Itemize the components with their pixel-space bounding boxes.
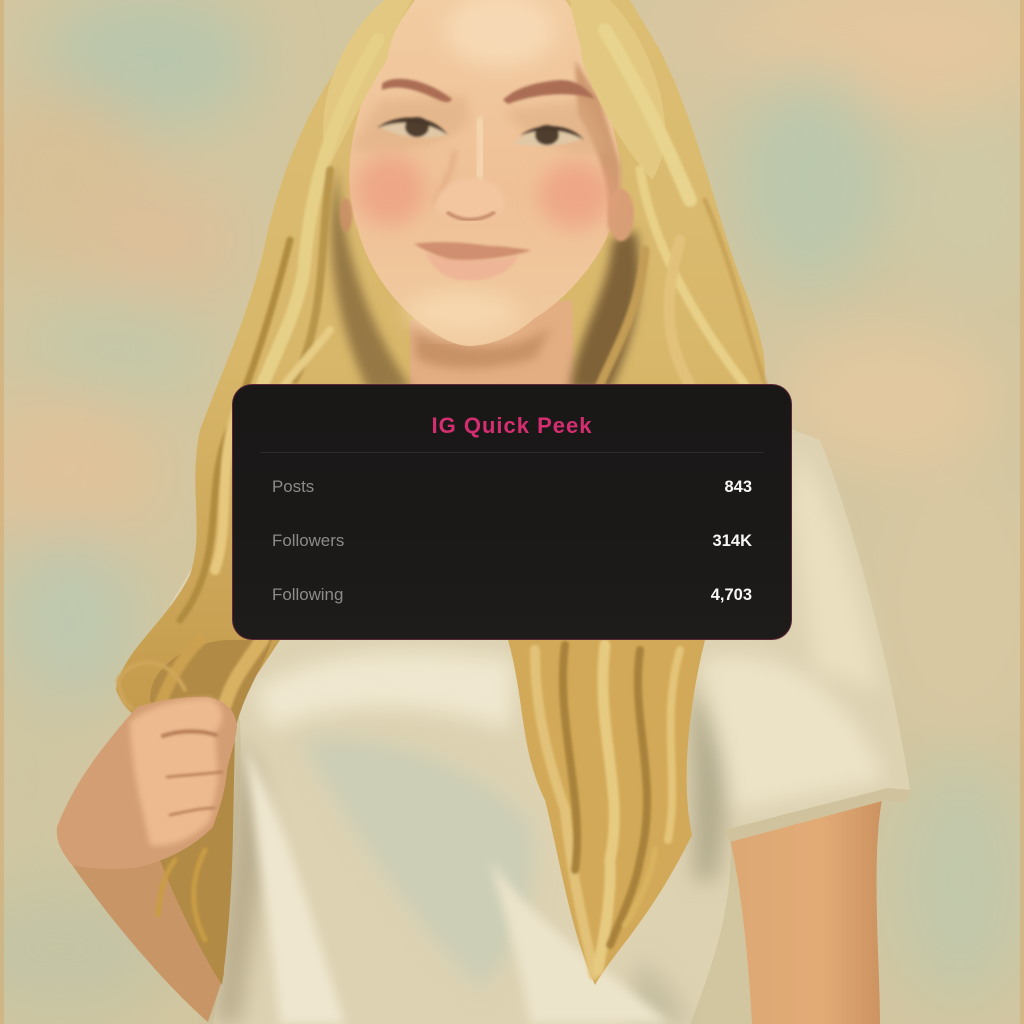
stat row: following: 4,703	[711, 586, 752, 604]
lower left hair	[118, 640, 272, 985]
eyebrows	[382, 79, 595, 104]
stat row: following	[272, 585, 752, 604]
face	[349, 0, 620, 346]
stat row: followers: 314K	[713, 532, 752, 550]
stat row: following: Following	[272, 585, 343, 604]
right arm and sleeve edge	[724, 788, 912, 1024]
right eye	[514, 125, 584, 146]
arm holding hair	[70, 830, 224, 1022]
card title: IG Quick Peek	[432, 413, 592, 438]
fist	[57, 697, 237, 869]
chin highlight	[407, 292, 517, 332]
stat row: followers	[272, 531, 752, 550]
cheeks	[356, 154, 611, 229]
ear	[340, 189, 634, 241]
forehead highlight	[445, 0, 555, 66]
stats card	[232, 384, 792, 640]
front hair lock	[508, 640, 705, 985]
t-shirt	[170, 425, 910, 1024]
long hair strands	[180, 30, 765, 620]
mouth	[414, 242, 532, 280]
neck	[410, 300, 575, 390]
left eye	[377, 117, 448, 138]
stat row: followers: Followers	[272, 531, 344, 550]
hair back mass	[116, 0, 765, 720]
nose	[435, 118, 505, 221]
stat row: posts	[272, 477, 752, 496]
stat row: posts: 843	[724, 478, 752, 496]
hair framing the face	[323, 0, 665, 180]
hair shadow beside face	[331, 165, 640, 390]
stat row: posts: Posts	[272, 477, 314, 496]
